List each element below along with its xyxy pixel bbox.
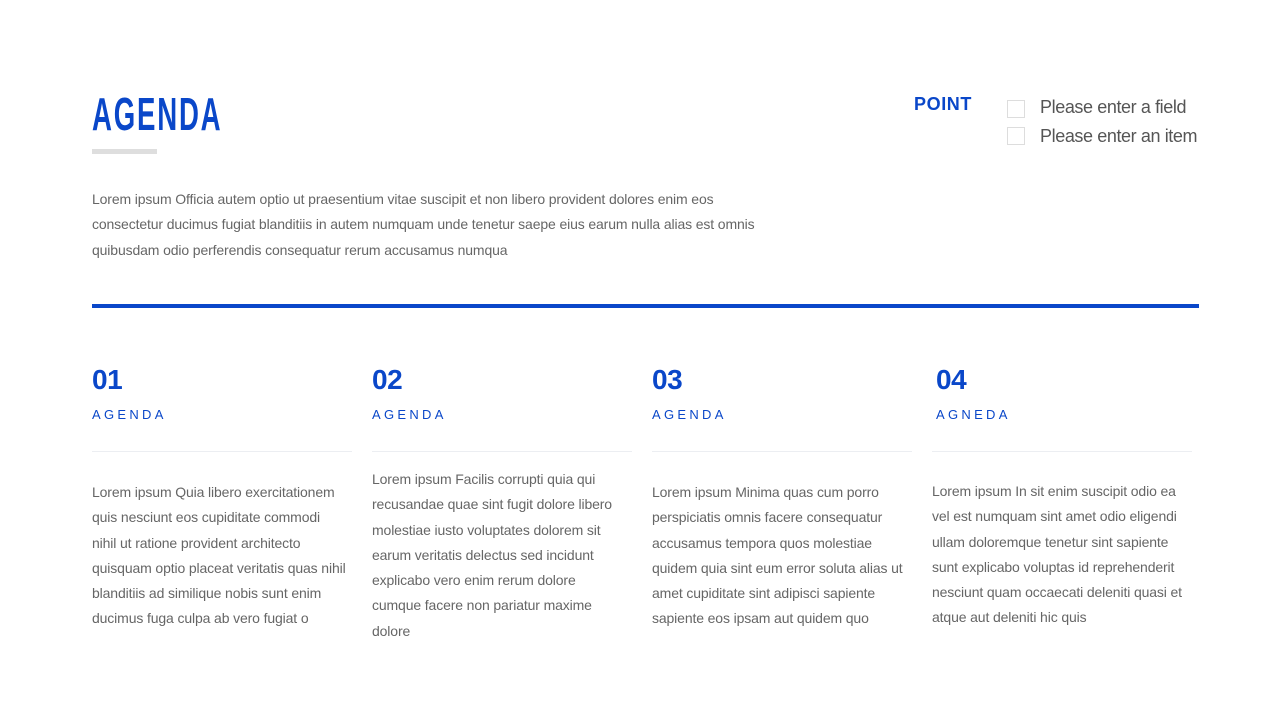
column 02: recusandae quae sint fugit dolore libero [372, 496, 612, 512]
column 01: quisquam optio placeat veritatis quas nihil [92, 560, 346, 576]
checkbox item 2: Please enter an item [1040, 126, 1197, 146]
column 04: vel est numquam sint amet odio eligendi [932, 508, 1177, 524]
title underline [92, 149, 157, 154]
column 04: AGNEDA [936, 407, 1011, 422]
column 04: 04 [936, 364, 966, 395]
column 02: dolore [372, 623, 410, 639]
column 01 [92, 364, 352, 626]
blue divider [92, 304, 1199, 308]
column 02: Lorem ipsum Facilis corrupti quia qui [372, 471, 595, 487]
column 01: ducimus fuga culpa ab vero fugiat o [92, 610, 308, 626]
column 03: accusamus tempora quos molestiae [652, 535, 872, 551]
point label: POINT [914, 94, 972, 114]
column 04 [932, 364, 1192, 625]
column 01: blanditiis ad similique nobis sunt enim [92, 585, 321, 601]
column 04: nesciunt quam occaecati deleniti quasi et [932, 584, 1182, 600]
column 02: molestiae iusto voluptates dolorem sit [372, 522, 601, 538]
column 04: sunt explicabo voluptas id reprehenderit [932, 559, 1174, 575]
column 01: quis nesciunt eos cupiditate commodi [92, 509, 320, 525]
column 03: 03 [652, 364, 682, 395]
column 03: AGENDA [652, 407, 727, 422]
column 03: Lorem ipsum Minima quas cum porro [652, 484, 879, 500]
column 03: amet cupiditate sint adipisci sapiente [652, 585, 875, 601]
checklist [1007, 97, 1197, 146]
column 01: AGENDA [92, 407, 167, 422]
column 04: atque aut deleniti hic quis [932, 609, 1086, 625]
column 03 [652, 364, 912, 626]
intro text [92, 191, 754, 258]
column 02: explicabo vero enim rerum dolore [372, 572, 576, 588]
column 03: sapiente eos ipsam aut quidem quo [652, 610, 869, 626]
column 01: nihil ut ratione provident architecto [92, 535, 300, 551]
column 03: perspiciatis omnis facere consequatur [652, 509, 882, 525]
column 02: cumque facere non pariatur maxime [372, 597, 592, 613]
title: AGENDA [92, 88, 222, 140]
column 03: quidem quia sint eum error soluta alias ut [652, 560, 903, 576]
column 02: 02 [372, 364, 402, 395]
column 01: Lorem ipsum Quia libero exercitationem [92, 484, 335, 500]
intro text: consectetur ducimus fugiat blanditiis in autem numquam unde tenetur saepe eius earum nulla alias est omnis [92, 216, 754, 232]
column 04: ullam doloremque tenetur sint sapiente [932, 534, 1168, 550]
checkbox item 1: Please enter a field [1040, 97, 1186, 117]
intro text: quibusdam odio perferendis consequatur rerum accusamus numqua [92, 242, 507, 258]
column 02: AGENDA [372, 407, 447, 422]
column 04: Lorem ipsum In sit enim suscipit odio ea [932, 483, 1176, 499]
column 01: 01 [92, 364, 122, 395]
column 02 [372, 364, 632, 639]
column 02: earum veritatis delectus sed incidunt [372, 547, 594, 563]
intro text: Lorem ipsum Officia autem optio ut praesentium vitae suscipit et non libero provident dolores enim eos [92, 191, 713, 207]
